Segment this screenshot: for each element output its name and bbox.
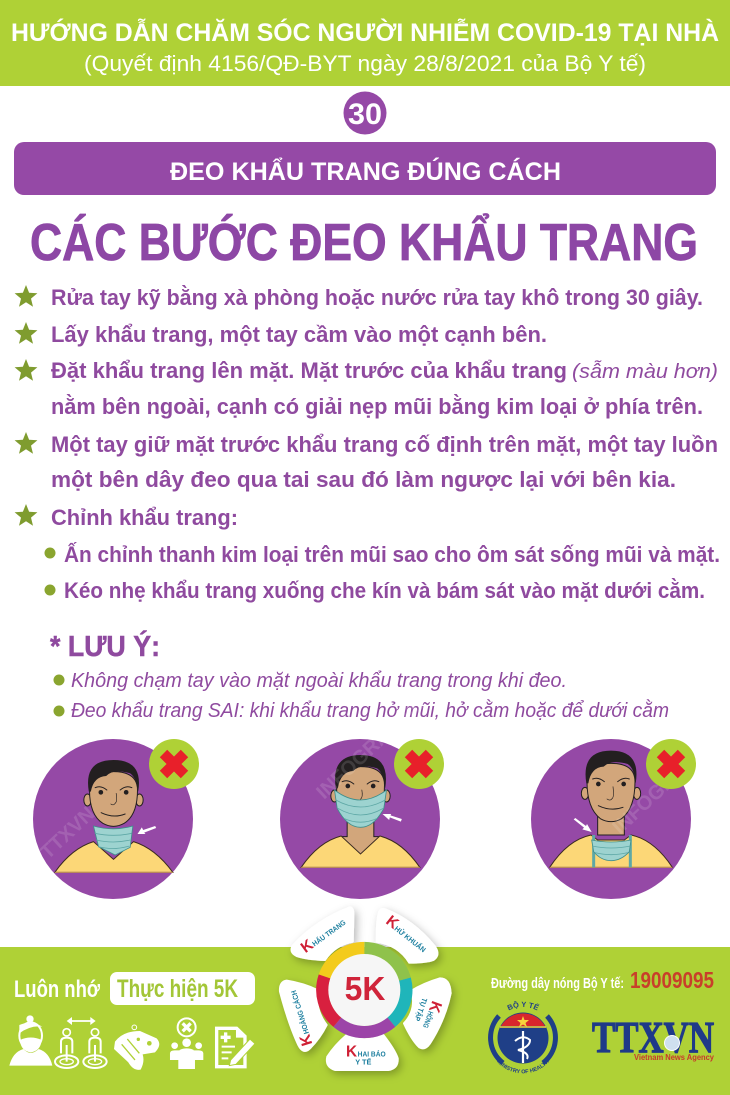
icon: red cross badge — [646, 739, 696, 789]
petal: Khai báo y tế: HAI BÁO — [358, 1050, 386, 1059]
icon: keep distance — [55, 1017, 107, 1068]
petal: Khẩu trang: K — [298, 936, 317, 957]
step 3 line 1: Đặt khẩu trang lên mặt. Mặt trước của khẩu trang — [51, 358, 567, 383]
illustration: mask under chin (wrong) — [531, 718, 730, 899]
petal: Không tụ tập: K — [425, 999, 445, 1015]
note 1: Không chạm tay vào mặt ngoài khẩu trang trong khi đeo. — [71, 670, 567, 692]
hotline: 19009095 — [630, 967, 714, 993]
hotline — [491, 967, 714, 993]
petal: Khử khuẩn: K — [383, 912, 402, 933]
steps list — [15, 285, 720, 603]
subtitle: (Quyết định 4156/QĐ-BYT ngày 28/8/2021 của Bộ Y tế) — [84, 51, 646, 76]
icon: washing hands — [114, 1025, 159, 1070]
petal: Khẩu trang: HẨU TRANG — [310, 918, 348, 948]
petal: Không tụ tập: HÔNG — [421, 1010, 435, 1030]
icon: no gathering — [170, 1018, 203, 1069]
reminder label — [14, 972, 255, 1005]
footer band — [0, 947, 730, 1095]
petal: Khoảng cách: K — [297, 1032, 316, 1048]
icon: star 4 — [15, 432, 37, 454]
step 1: Rửa tay kỹ bằng xà phòng hoặc nước rửa tay khô trong 30 giây. — [51, 285, 703, 310]
header band — [0, 0, 730, 86]
illustration: mask on neck (wrong) — [33, 739, 199, 899]
step 5: Chỉnh khẩu trang: — [51, 505, 238, 530]
step 4 line 1: Một tay giữ mặt trước khẩu trang cố định trên mặt, một tay luồn — [51, 432, 718, 457]
watermark: TTXVN — [36, 803, 99, 864]
bullet — [44, 548, 56, 558]
step 4 line 2: một bên dây đeo qua tai sau đó làm ngược lại với bên kia. — [51, 467, 676, 492]
logo: TTXVN: Vietnam News Agency — [634, 1052, 714, 1062]
bullet — [54, 674, 64, 686]
note 2: Đeo khẩu trang SAI: khi khẩu trang hở mũi, hở cằm hoặc để dưới cằm — [71, 699, 669, 722]
logo: Ministry of Health: BỘ Y TẾ — [507, 1001, 540, 1010]
title: HƯỚNG DẪN CHĂM SÓC NGƯỜI NHIỄM COVID-19 TẠI NHÀ — [11, 17, 719, 47]
reminder label: Luôn nhớ — [14, 976, 101, 1003]
5K icons row — [9, 1015, 255, 1070]
icon: star 3 — [15, 359, 37, 381]
5K diagram — [280, 907, 451, 1070]
petal: Không tụ tập — [404, 978, 451, 1048]
ring segments — [322, 948, 406, 1032]
center 5K — [328, 954, 400, 1026]
illustration: mask under nose (wrong) — [280, 683, 444, 899]
petal: Khoảng cách — [280, 981, 327, 1051]
petal: Không tụ tập: TỤ TẬP — [413, 997, 429, 1022]
center 5K: 5K — [345, 971, 385, 1008]
step 3 note: (sẫm màu hơn) — [572, 360, 718, 383]
petal: Khẩu trang — [291, 907, 353, 960]
icon: star 2 — [15, 322, 37, 344]
icon: star 1 — [15, 285, 37, 307]
bullet — [44, 584, 56, 596]
section banner: ĐEO KHẨU TRANG ĐÚNG CÁCH — [170, 156, 561, 186]
icon: red cross badge — [149, 739, 199, 789]
petal: Khoảng cách: HOẢNG CÁCH — [289, 989, 311, 1035]
logo: Ministry of Health: MINISTRY OF HEALTH — [497, 1062, 549, 1074]
reminder label: Thực hiện 5K — [117, 975, 238, 1003]
hotline: Đường dây nóng Bộ Y tế: — [491, 975, 624, 992]
petal: Khai báo y tế — [327, 1035, 398, 1070]
number badge 30 — [344, 92, 386, 134]
number badge 30: 30 — [348, 98, 382, 131]
note heading: * LƯU Ý: — [50, 629, 160, 663]
section banner — [14, 142, 716, 195]
icon: health declaration form — [215, 1027, 255, 1068]
step 3 line 2: nằm bên ngoài, cạnh có giải nẹp mũi bằng kim loại ở phía trên. — [51, 394, 703, 419]
petal: Khử khuẩn: HỬ KHUẨN — [393, 924, 428, 954]
watermark: INFOGRAPHICS — [312, 683, 440, 804]
petal: Khử khuẩn — [377, 909, 437, 963]
icon: person with mask — [9, 1015, 52, 1066]
step 2: Lấy khẩu trang, một tay cầm vào một cạnh bên. — [51, 322, 547, 347]
icon: star 5 — [15, 504, 37, 526]
logo: Ministry of Health — [488, 1001, 558, 1074]
note section — [50, 629, 669, 722]
petal: Khai báo y tế: K — [346, 1044, 357, 1061]
icon: red cross badge — [394, 739, 444, 789]
petal: Khai báo y tế: Y TẾ — [355, 1057, 372, 1067]
bullet — [54, 706, 64, 716]
sub-step 2: Kéo nhẹ khẩu trang xuống che kín và bám sát vào mặt dưới cằm. — [64, 578, 705, 603]
